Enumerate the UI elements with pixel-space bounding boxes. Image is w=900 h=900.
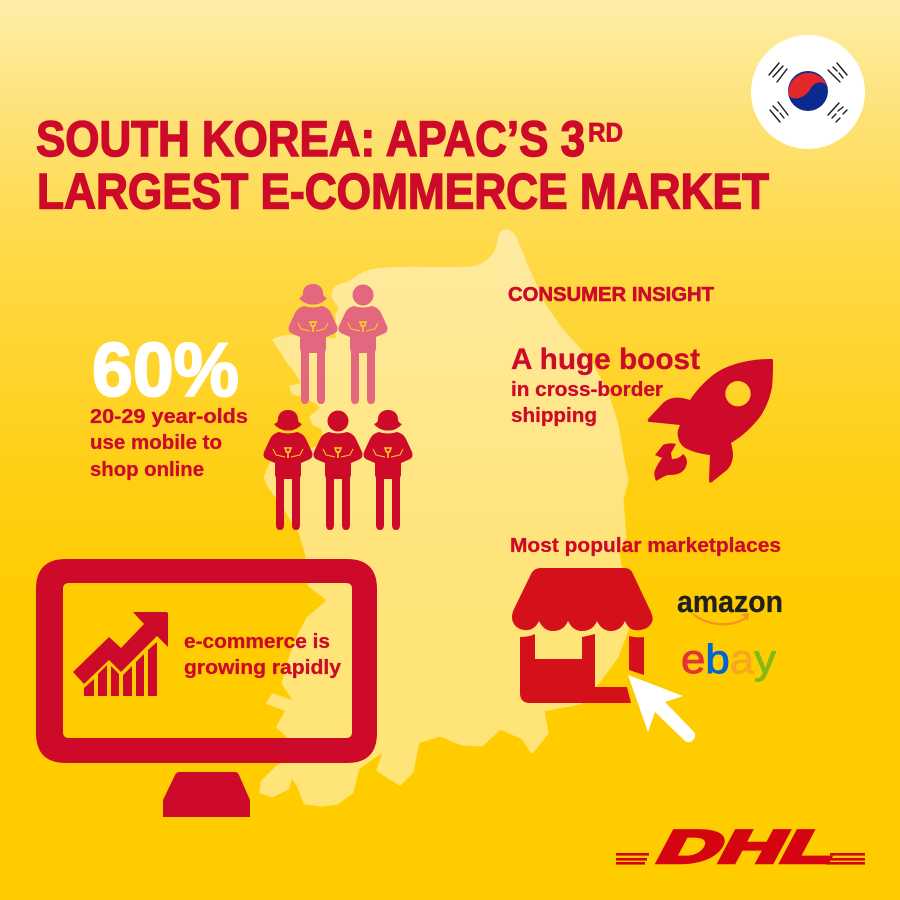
- logo: ebay: ebay: [681, 636, 777, 682]
- stat description: shop online: [90, 459, 204, 481]
- text: e-commerce growth: e-commerce is: [184, 630, 330, 653]
- flag badge: South Korea: [751, 35, 865, 149]
- icon: cursor arrow: [628, 675, 695, 742]
- logo: DHL: DHL: [648, 822, 850, 873]
- rocket flame: [654, 443, 687, 481]
- text: cross-border boost: A huge boost: [511, 343, 700, 376]
- people icons: 2 of 5 faded, 3 of 5 solid: [264, 284, 412, 530]
- text: e-commerce growth: [184, 630, 342, 679]
- monitor frame: [36, 559, 377, 763]
- stat: 60 percent: [90, 328, 248, 481]
- text: cross-border boost: shipping: [511, 405, 597, 427]
- stat description: [90, 406, 248, 481]
- stat: 60 percent: 60%: [92, 328, 239, 413]
- title: SOUTH KOREA: APAC’S 3: [36, 111, 585, 167]
- stat description: use mobile to: [90, 432, 222, 454]
- title: [36, 111, 769, 220]
- text: e-commerce growth: growing rapidly: [184, 656, 342, 679]
- logo: amazon: amazon: [677, 584, 783, 619]
- stat description: 20-29 year-olds: [90, 406, 248, 428]
- monitor stand: [163, 772, 250, 817]
- icon: rising chart: [73, 612, 168, 696]
- map of South Korea: [261, 231, 628, 805]
- title: LARGEST E-COMMERCE MARKET: [37, 164, 769, 220]
- text: cross-border boost: in cross-border: [511, 379, 663, 401]
- monitor: [36, 559, 377, 817]
- icon: rocket: [648, 359, 773, 483]
- heading: most popular marketplaces: Most popular marketplaces: [510, 535, 781, 557]
- heading: consumer insight: CONSUMER INSIGHT: [508, 284, 714, 306]
- text: cross-border boost: [511, 343, 700, 427]
- icon: storefront: [512, 568, 653, 703]
- title: RD: [588, 118, 623, 148]
- taegeuk symbol: [788, 71, 828, 111]
